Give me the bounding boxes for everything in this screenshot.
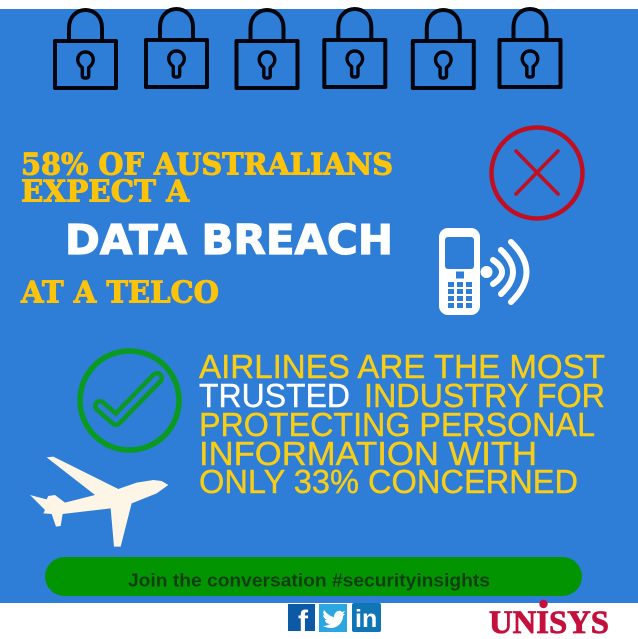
- heading line: expect a: EXPECT A: [21, 174, 190, 210]
- heading line: 58% of Australians: 58% OF AUSTRALIANS: [21, 148, 393, 182]
- icon: twitter: [319, 604, 347, 632]
- call to action pill: [45, 557, 582, 596]
- text line 1: AIRLINES ARE THE MOST: [199, 348, 605, 385]
- icon: padlock 4: [324, 9, 385, 87]
- icon: padlock 5: [413, 10, 474, 88]
- icon: green check mark in circle: [80, 351, 179, 450]
- text line 5: ONLY 33% CONCERNED: [199, 463, 578, 500]
- icon: facebook: f: [298, 605, 309, 638]
- icon: airplane: [30, 457, 168, 547]
- heading line: data breach: DATA BREACH: [65, 216, 393, 264]
- icon: padlock 1: [55, 10, 116, 88]
- text block: airlines trust statement: [199, 348, 605, 500]
- icon: mobile phone with signal waves: [439, 228, 526, 315]
- heading line: at a telco: AT A TELCO: [20, 276, 219, 310]
- row of padlock icons: [55, 9, 560, 88]
- icon: red cross in circle: [492, 128, 582, 218]
- icon: padlock 3: [236, 10, 298, 88]
- heading: telco data breach statistic: [20, 148, 393, 310]
- call to action pill: Join the conversation #securityinsights: [128, 570, 490, 590]
- text line 3: PROTECTING PERSONAL: [199, 406, 595, 443]
- social media icons: [288, 603, 381, 638]
- icon: padlock 6: [500, 9, 560, 87]
- text line 2: trusted highlighted: TRUSTED: [199, 377, 350, 414]
- icon: padlock 2: [146, 9, 207, 87]
- text line 4: INFORMATION WITH: [199, 435, 537, 472]
- text line 2: industry for: INDUSTRY FOR: [364, 377, 605, 414]
- icon: linkedin: in: [355, 605, 377, 633]
